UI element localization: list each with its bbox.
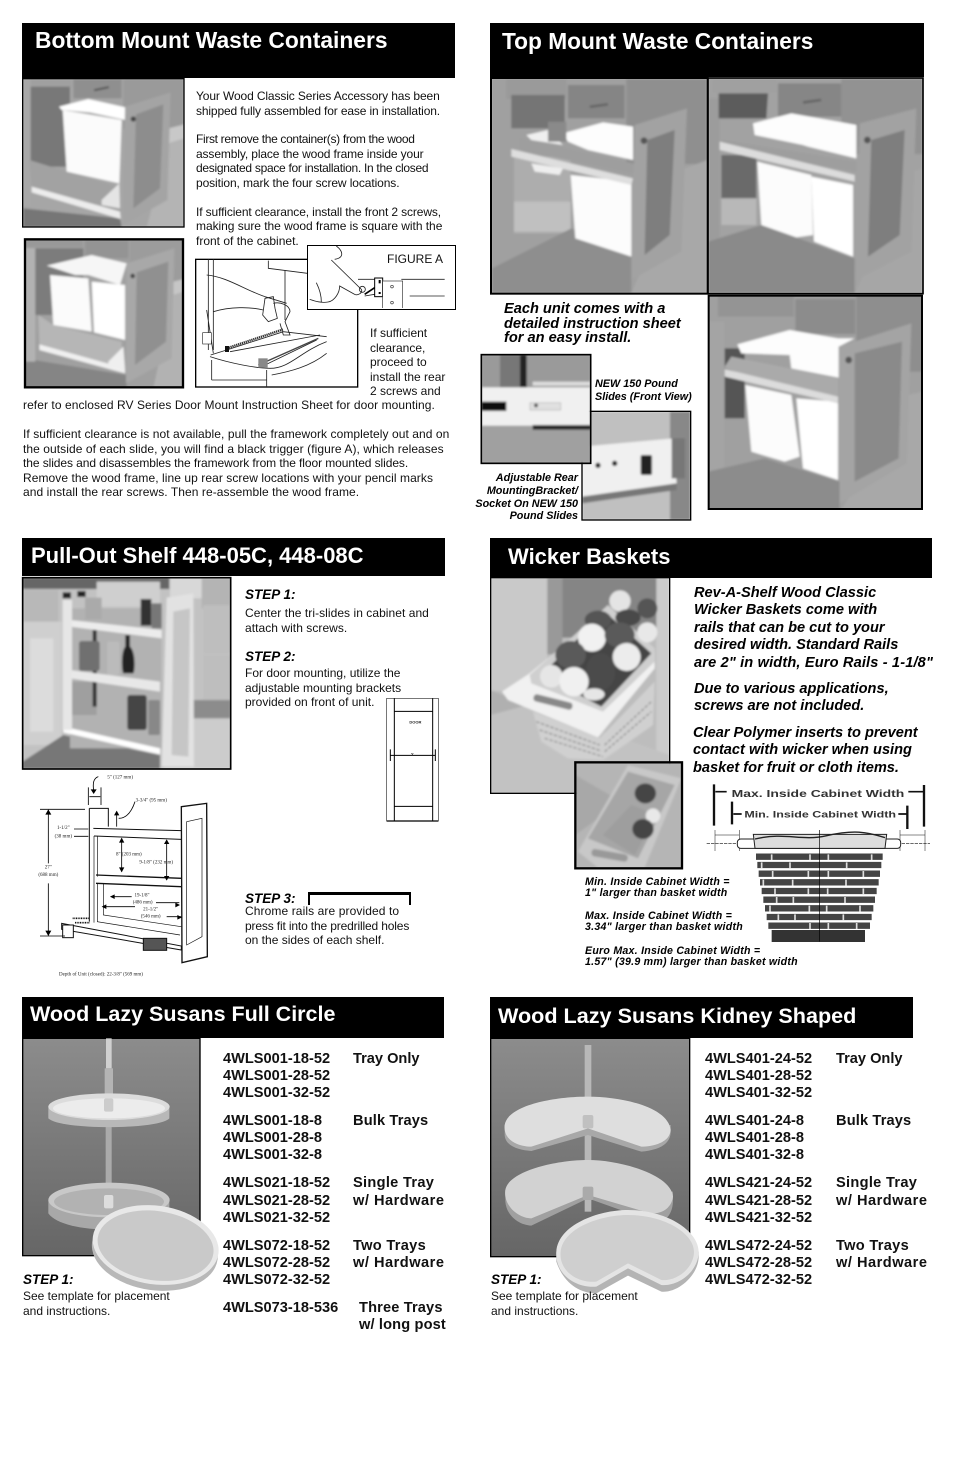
heading: top mount waste containers: Top Mount Waste Containers: [502, 28, 813, 54]
heading: lazy susans kidney shaped: Wood Lazy Susans Kidney Shaped: [498, 1003, 856, 1028]
photo: double bottom mount container: [24, 238, 184, 388]
photo: single top mount container: [491, 78, 708, 294]
table: kidney part numbers: 4WLS401-28-8: [705, 1130, 804, 1146]
text: min/max width notes: 1.57" (39.9 mm) larger than basket width: [585, 956, 798, 968]
caption: rear bracket: [475, 472, 579, 522]
step 3 text: press fit into the predrilled holes: [245, 918, 409, 932]
table: full circle part numbers: 4WLS001-18-52: [223, 1050, 330, 1066]
text: wicker rails note: Rev-A-Shelf Wood Classic: [694, 584, 876, 600]
bracket rule: [308, 892, 411, 905]
text block: rear screws: clearance,: [370, 340, 425, 354]
diagram: shelf dimensions: 1-1/2": [57, 826, 70, 831]
diagram: shelf dimensions: (38 mm): [55, 835, 72, 840]
text block: insufficient clearance: the outside of each slide, you will find a black trigger (figure A), which releases: [23, 442, 444, 456]
table: kidney part numbers: 4WLS472-24-52: [705, 1238, 812, 1254]
step 1 text: kidney: and instructions.: [491, 1304, 578, 1318]
heading: top mount waste containers: [490, 23, 924, 77]
step 1 label: full circle: STEP 1:: [23, 1272, 74, 1287]
table: full circle descriptions: w/ Hardware: [353, 1255, 444, 1271]
photos: bottom mount containers: [22, 78, 185, 388]
step 1 text: attach with screws.: [245, 620, 347, 634]
table: full circle descriptions: [353, 1050, 446, 1333]
text: min/max width notes: Min. Inside Cabinet Width =: [585, 876, 730, 888]
text block: insufficient clearance: [23, 427, 449, 499]
heading: pull-out shelf: [22, 538, 445, 576]
table: kidney descriptions: Tray Only: [836, 1050, 903, 1066]
table: full circle descriptions: Tray Only: [353, 1050, 420, 1066]
table: kidney part numbers: 4WLS401-24-52: [705, 1050, 812, 1066]
table: kidney part numbers: 4WLS401-32-8: [705, 1147, 804, 1163]
illustration: hand installing slide: [195, 258, 358, 388]
label: figure A: FIGURE A: [387, 252, 443, 266]
heading: lazy susans kidney shaped: [490, 997, 913, 1038]
photo: double top mount close view: [708, 295, 923, 510]
step 1 text: full circle: See template for placement: [23, 1289, 170, 1303]
photo: double top mount containers: [708, 78, 923, 294]
caption: rear bracket: Adjustable Rear: [496, 472, 578, 484]
text block: bottom mount instructions: First remove the container(s) from the wood: [196, 132, 415, 146]
table: full circle part numbers: 4WLS001-32-8: [223, 1147, 322, 1163]
step 1 text: [245, 606, 429, 634]
text block: bottom mount instructions: position, mark the four screw locations.: [196, 176, 399, 190]
caption: rear bracket: MountingBracket/: [487, 485, 578, 497]
table: kidney descriptions: w/ Hardware: [836, 1193, 927, 1209]
text: applications note: [694, 680, 889, 714]
text block: bottom mount instructions: front of the cabinet.: [196, 234, 299, 248]
table: full circle part numbers: 4WLS072-28-52: [223, 1255, 330, 1271]
table: full circle descriptions: Three Trays: [359, 1300, 443, 1316]
text block: bottom mount instructions: If sufficient clearance, install the front 2 screws,: [196, 204, 441, 218]
table: kidney descriptions: w/ Hardware: [836, 1255, 927, 1271]
diagram: shelf dimensions: (486 mm): [133, 900, 153, 905]
text block: rear screws: 2 screws and: [370, 384, 441, 398]
text block: rear screws: proceed to: [370, 355, 427, 369]
caption: front view slides: [595, 378, 692, 403]
table: kidney descriptions: [836, 1050, 927, 1271]
text: min/max width notes: 1" larger than basket width: [585, 886, 727, 898]
text block: rear screws: install the rear: [370, 370, 445, 384]
text: min/max width notes: Max. Inside Cabinet Width =: [585, 910, 732, 922]
text block: bottom mount instructions: making sure the wood frame is square with the: [196, 219, 442, 233]
photo: front slide: [481, 355, 591, 463]
table: kidney part numbers: 4WLS401-28-52: [705, 1068, 812, 1084]
text block: insufficient clearance: the slides and disassembles the framework from the floor mounted slides.: [23, 456, 408, 470]
table: full circle part numbers: [223, 1050, 338, 1316]
step 3 text: on the sides of each shelf.: [245, 933, 384, 947]
diagram: shelf dimensions: Depth of Unit (closed): 22-3/8" (569 mm): [59, 973, 143, 978]
heading: bottom mount waste containers: Bottom Mount Waste Containers: [35, 27, 388, 53]
diagram: door template: Y: [411, 751, 414, 756]
step 2 label: STEP 2:: [245, 649, 296, 664]
table: full circle descriptions: w/ long post: [359, 1317, 446, 1333]
text: applications note: Due to various applications,: [694, 680, 889, 696]
text block: bottom mount instructions: assembly, place the wood frame inside your: [196, 146, 424, 160]
table: kidney descriptions: Single Tray: [836, 1175, 917, 1191]
text: applications note: screws are not included.: [694, 698, 864, 714]
step 2 text: provided on front of unit.: [245, 695, 374, 709]
step 2 text: adjustable mounting brackets: [245, 680, 401, 694]
text: easy install note: for an easy install.: [504, 330, 631, 346]
heading: bottom mount waste containers: [22, 23, 455, 78]
text: polymer insert note: [693, 724, 918, 776]
text block: insufficient clearance: If sufficient clearance is not available, pull the framework completely out and on: [23, 427, 449, 441]
diagram: shelf dimensions: 8" (203 mm): [116, 853, 142, 858]
table: full circle part numbers: 4WLS072-18-52: [223, 1238, 330, 1254]
step 1 text: Center the tri-slides in cabinet and: [245, 606, 429, 620]
step 1 text: kidney: [491, 1289, 638, 1318]
table: full circle part numbers: 4WLS073-18-536: [223, 1300, 338, 1316]
photo: kidney lazy susan: [490, 1038, 699, 1294]
table: full circle part numbers: 4WLS001-28-8: [223, 1130, 322, 1146]
step 1 text: full circle: and instructions.: [23, 1304, 110, 1318]
photos: wicker baskets: [490, 578, 684, 870]
diagram: shelf dimensions: (688 mm): [38, 873, 59, 878]
table: kidney descriptions: Two Trays: [836, 1238, 909, 1254]
text: min/max width notes: [585, 876, 798, 968]
table: kidney part numbers: 4WLS472-32-52: [705, 1272, 812, 1288]
step 3 text: Chrome rails are provided to: [245, 904, 399, 918]
photo: rear bracket: [582, 411, 691, 520]
text: wicker rails note: rails that can be cut to your: [694, 620, 885, 636]
photo: basket with fruit: [491, 578, 670, 793]
heading: wicker baskets: [490, 538, 932, 578]
diagram: basket width: Min. Inside Cabinet Width: [744, 810, 896, 820]
diagram: shelf dimensions: [38, 774, 208, 978]
table: full circle descriptions: Single Tray: [353, 1175, 434, 1191]
text block: insufficient clearance: Remove the wood frame, line up rear screw locations with your pencil marks: [23, 470, 433, 484]
photo: full circle lazy susan: [22, 1038, 218, 1291]
caption: front view slides: Slides (Front View): [595, 391, 692, 403]
caption: front view slides: NEW 150 Pound: [595, 378, 678, 390]
text: easy install note: detailed instruction sheet: [504, 316, 681, 332]
loose tray: [87, 1197, 224, 1299]
diagram: door template: [386, 698, 439, 822]
diagram: shelf dimensions: 19-1/8": [134, 893, 150, 898]
diagram: shelf dimensions: 3-3/4" (95 mm): [136, 798, 167, 803]
step 1 label: kidney: STEP 1:: [491, 1272, 542, 1287]
text block: bottom mount instructions: [196, 89, 442, 248]
table: kidney part numbers: 4WLS421-28-52: [705, 1193, 812, 1209]
text block: bottom mount instructions: shipped fully assembled for ease in installation.: [196, 104, 440, 118]
heading: lazy susans full circle: [22, 997, 444, 1038]
text: polymer insert note: basket for fruit or cloth items.: [693, 760, 899, 776]
heading: wicker baskets: Wicker Baskets: [508, 544, 670, 569]
table: full circle part numbers: 4WLS001-18-8: [223, 1113, 322, 1129]
text block: door mounting note: refer to enclosed RV Series Door Mount Instruction Sheet for door mounting.: [23, 398, 435, 412]
loose kidney tray: [556, 1210, 699, 1293]
step 3 label: STEP 3:: [245, 891, 296, 906]
text: polymer insert note: Clear Polymer inserts to prevent: [693, 724, 918, 740]
heading: pull-out shelf: Pull-Out Shelf 448-05C, 448-08C: [31, 543, 364, 568]
table: kidney part numbers: 4WLS421-24-52: [705, 1175, 812, 1191]
diagram: shelf dimensions: 5" (127 mm): [107, 776, 133, 781]
text: min/max width notes: Euro Max. Inside Cabinet Width =: [585, 944, 760, 956]
step 2 text: [245, 666, 401, 709]
step 1 text: kidney: See template for placement: [491, 1289, 638, 1303]
text block: bottom mount instructions: designated space for installation. In the closed: [196, 161, 428, 175]
photo: basket with clear insert: [575, 762, 682, 868]
step 2 text: For door mounting, utilize the: [245, 666, 400, 680]
illustration: figure A: [307, 245, 456, 310]
diagram: door template: DOOR: [409, 719, 421, 724]
table: full circle part numbers: 4WLS001-32-52: [223, 1085, 330, 1101]
text: wicker rails note: Wicker Baskets come with: [694, 602, 877, 618]
diagram: shelf dimensions: (546 mm): [141, 915, 161, 920]
diagram: shelf dimensions: 27": [45, 865, 52, 870]
photo: pull-out shelf: [22, 576, 232, 770]
text: easy install note: Each unit comes with a: [504, 301, 665, 317]
table: full circle part numbers: 4WLS001-28-52: [223, 1068, 330, 1084]
step 3 text: [245, 904, 409, 947]
text block: insufficient clearance: and install the rear screws. Then re-assemble the wood frame.: [23, 485, 359, 499]
step 1 text: full circle: [23, 1289, 170, 1318]
table: kidney part numbers: 4WLS472-28-52: [705, 1255, 812, 1271]
table: kidney part numbers: 4WLS401-32-52: [705, 1085, 812, 1101]
text: min/max width notes: 3.34" larger than basket width: [585, 920, 743, 932]
diagram: basket width: [706, 784, 930, 942]
diagram: shelf dimensions: 21-1/2": [143, 907, 158, 912]
text block: rear screws: [370, 326, 446, 398]
table: kidney part numbers: [705, 1050, 812, 1288]
table: full circle descriptions: Bulk Trays: [353, 1113, 428, 1129]
caption: rear bracket: Pound Slides: [510, 510, 578, 522]
table: full circle descriptions: w/ Hardware: [353, 1193, 444, 1209]
photo: single bottom mount container: [22, 78, 184, 227]
table: kidney part numbers: 4WLS421-32-52: [705, 1210, 812, 1226]
diagram: basket width: Max. Inside Cabinet Width: [732, 789, 904, 800]
table: full circle part numbers: 4WLS021-28-52: [223, 1193, 330, 1209]
table: full circle descriptions: Two Trays: [353, 1238, 426, 1254]
text: wicker rails note: are 2" in width, Euro Rails - 1-1/8": [694, 654, 933, 670]
table: full circle part numbers: 4WLS021-18-52: [223, 1175, 330, 1191]
text: wicker rails note: [694, 584, 933, 670]
photos: top mount containers: [490, 77, 924, 510]
table: full circle part numbers: 4WLS072-32-52: [223, 1272, 330, 1288]
text block: rear screws: If sufficient: [370, 326, 427, 340]
text block: bottom mount instructions: Your Wood Classic Series Accessory has been: [196, 89, 440, 103]
text: wicker rails note: desired width. Standard Rails: [694, 637, 898, 653]
table: full circle part numbers: 4WLS021-32-52: [223, 1210, 330, 1226]
table: kidney part numbers: 4WLS401-24-8: [705, 1113, 804, 1129]
diagram: shelf dimensions: 9-1/8" (232 mm): [139, 861, 173, 866]
table: kidney descriptions: Bulk Trays: [836, 1113, 911, 1129]
text: polymer insert note: contact with wicker when using: [693, 742, 912, 758]
heading: lazy susans full circle: Wood Lazy Susans Full Circle: [30, 1002, 335, 1026]
caption: rear bracket: Socket On NEW 150: [475, 498, 578, 510]
step 1 label: STEP 1:: [245, 587, 296, 602]
text: easy install note: [504, 301, 682, 346]
photos: 150 pound slides: [480, 354, 692, 521]
